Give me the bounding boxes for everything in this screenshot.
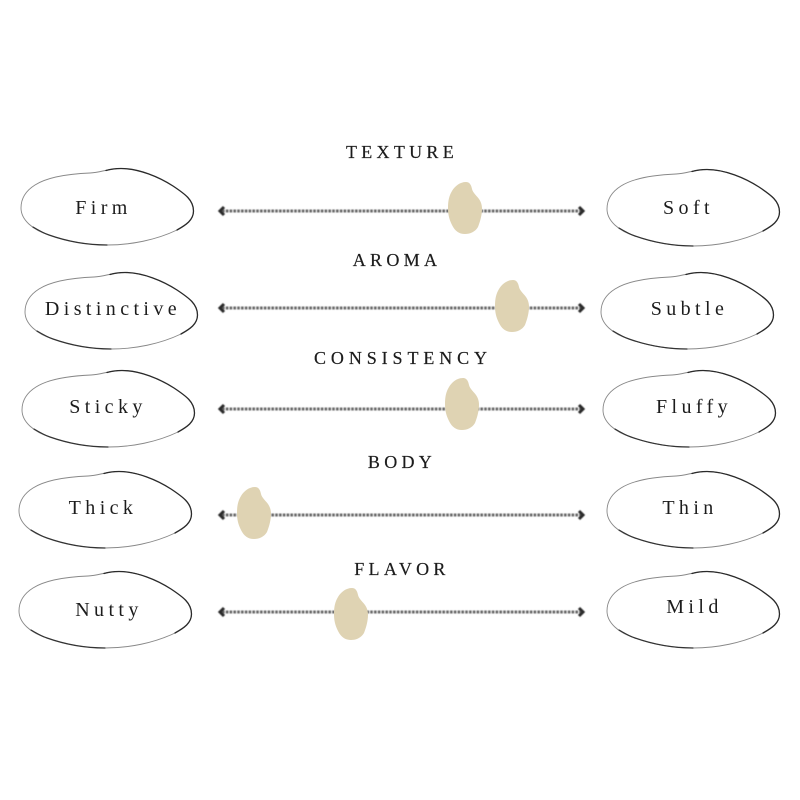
arrow: texture scale [220, 207, 583, 215]
row: body [19, 452, 780, 548]
heading: TEXTURE: TEXTURE [346, 142, 458, 162]
right blob: Soft: Soft [663, 197, 714, 219]
right blob: Subtle [601, 272, 774, 349]
right blob: Thin: Thin [662, 497, 718, 519]
arrow: flavor scale [220, 608, 583, 616]
arrow: aroma scale [220, 304, 583, 312]
row: consistency [22, 348, 776, 447]
left blob: Nutty: Nutty [75, 599, 143, 621]
right blob: Fluffy: Fluffy [656, 396, 732, 418]
right blob: Mild [607, 572, 780, 648]
icon: rice grain marker, aroma [495, 280, 529, 332]
row: texture [21, 142, 780, 246]
left blob: Firm [21, 168, 194, 245]
left blob: Distinctive: Distinctive [45, 298, 181, 320]
left blob: Nutty [19, 572, 192, 648]
icon: rice grain marker, body [237, 487, 271, 539]
right blob: Mild: Mild [666, 596, 723, 618]
row: aroma [25, 250, 774, 349]
row: flavor [19, 559, 780, 648]
left blob: Sticky: Sticky [69, 396, 147, 418]
heading: FLAVOR: FLAVOR [354, 559, 450, 579]
arrow: body scale [220, 511, 583, 519]
icon: rice grain marker, flavor [334, 588, 368, 640]
left blob: Firm: Firm [75, 197, 132, 219]
left blob: Distinctive [25, 272, 198, 349]
heading: AROMA: AROMA [353, 250, 441, 270]
heading: BODY: BODY [368, 452, 436, 472]
right blob: Subtle: Subtle [651, 298, 728, 320]
right blob: Thin [607, 472, 780, 548]
right blob: Soft [607, 170, 780, 246]
icon: rice grain marker, consistency [445, 378, 479, 430]
right blob: Fluffy [603, 370, 776, 447]
arrow: consistency scale [220, 405, 583, 413]
left blob: Thick [19, 472, 192, 548]
heading: CONSISTENCY: CONSISTENCY [314, 348, 492, 368]
left blob: Sticky [22, 370, 194, 447]
icon: rice grain marker, texture [448, 182, 482, 234]
left blob: Thick: Thick [69, 497, 137, 519]
